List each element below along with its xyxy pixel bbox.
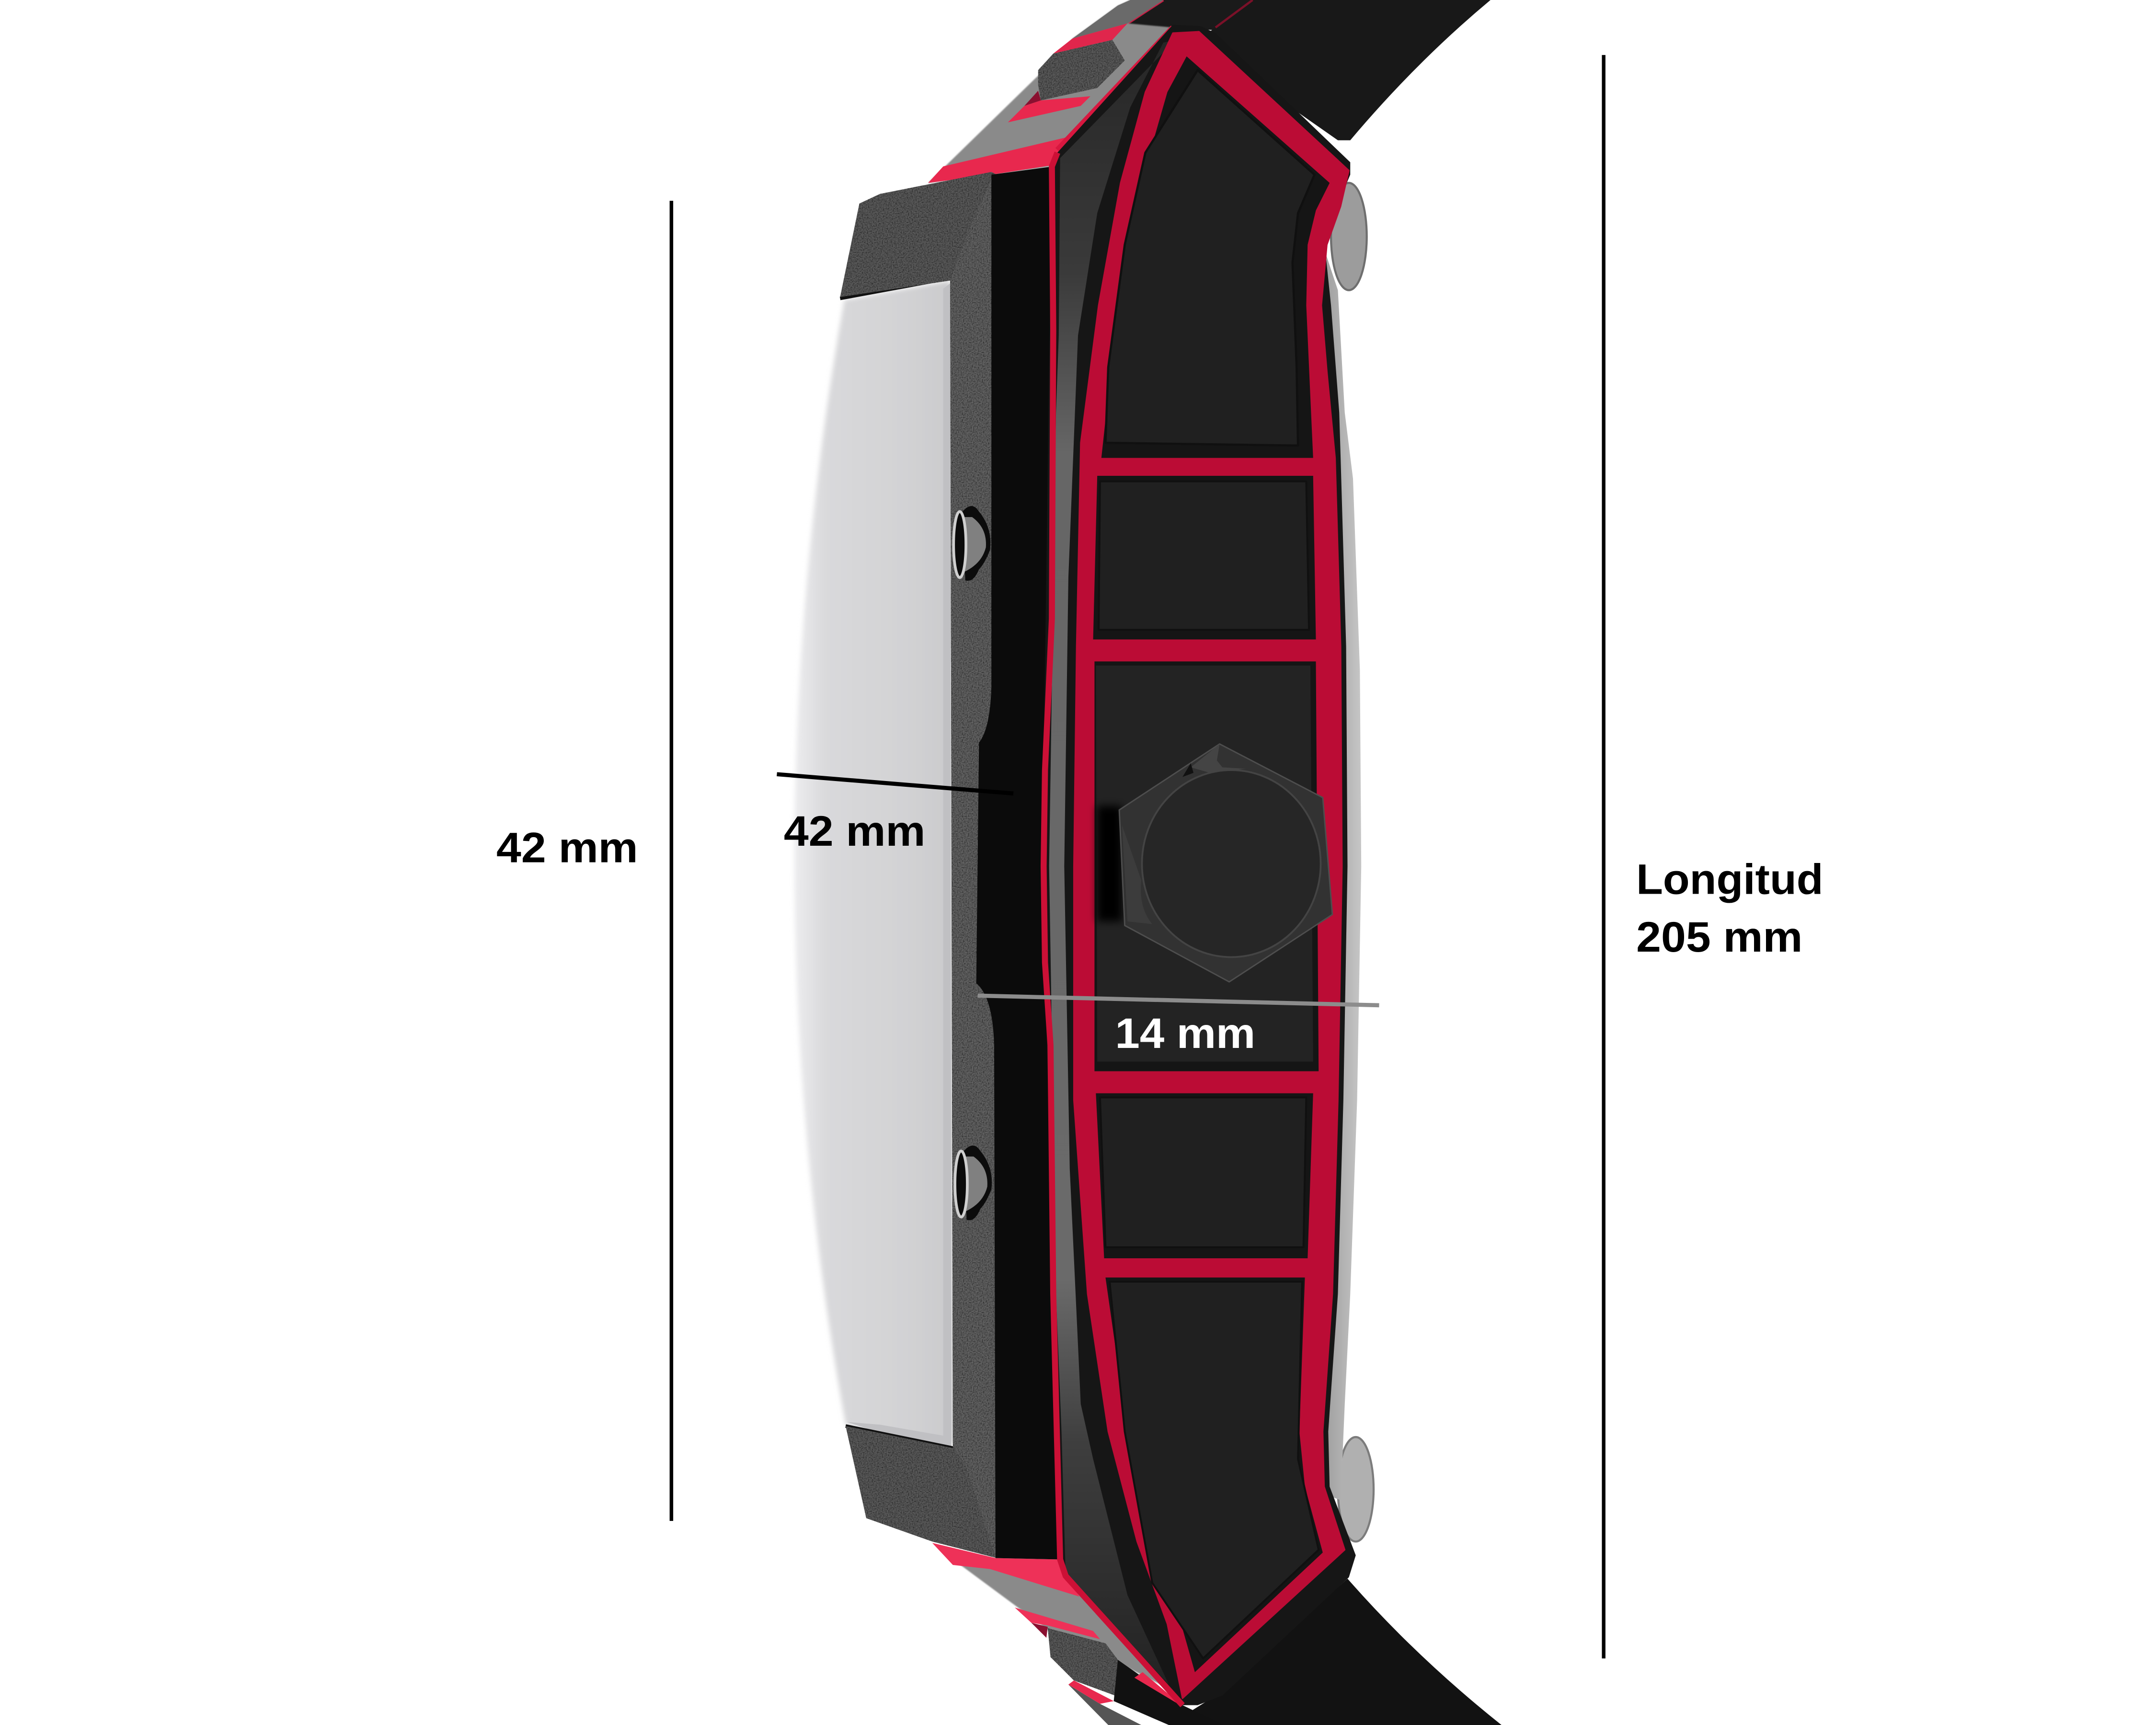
- middle stripe: [1015, 1608, 1100, 1639]
- dimension line: case thickness: [977, 996, 1379, 1005]
- dimension line: case height: [670, 201, 673, 1521]
- watch crystal: [794, 278, 953, 1448]
- label: longitud 205 mm: 205 mm: [1636, 913, 1802, 961]
- case side body: [1042, 25, 1356, 1705]
- panel: second rubber inset: [1093, 476, 1316, 640]
- spring bar pin: bottom: [1338, 1437, 1374, 1541]
- strap: top: [1111, 0, 1491, 140]
- panel: fourth rubber inset: [1096, 1093, 1313, 1258]
- label: 42 mm width: 42 mm: [784, 807, 925, 855]
- crown nut: [1119, 744, 1332, 982]
- middle stripe: [1008, 96, 1090, 122]
- label: 42 mm height: 42 mm: [496, 823, 638, 871]
- panel: upper rubber inset: [1101, 57, 1330, 458]
- thin red outer edge: [1044, 153, 1182, 1705]
- red inlay frame: [1074, 32, 1349, 1698]
- rear lug: bottom, with red stripes: [932, 1543, 1224, 1725]
- low stripe and tail: [1068, 1685, 1141, 1725]
- textured case block: [840, 172, 997, 1558]
- label: longitud 205 mm: Longitud: [1636, 855, 1823, 903]
- case screw: lower: [955, 1146, 992, 1220]
- upper stripe: [932, 1543, 1079, 1597]
- panel: centre rubber inset: [1094, 661, 1319, 1071]
- dimension line: case width: [777, 774, 1013, 794]
- black side band: [976, 166, 1060, 1559]
- upper stripe: [1053, 23, 1127, 54]
- silver case edge: [1306, 245, 1361, 1500]
- rear lug: top, with red stripes: [928, 0, 1173, 183]
- dark lug block: [1038, 40, 1125, 101]
- strap: bottom: [1169, 1579, 1502, 1725]
- label: 14 mm thickness: 14 mm: [1115, 1009, 1255, 1057]
- grey bevel strip: upper: [1049, 40, 1176, 1685]
- case screw: upper: [953, 506, 990, 581]
- spring bar pin: top: [1331, 183, 1367, 290]
- panel: lower rubber inset: [1105, 1277, 1323, 1672]
- lower stripe: [928, 138, 1066, 183]
- dimension line: total length: [1602, 55, 1606, 1658]
